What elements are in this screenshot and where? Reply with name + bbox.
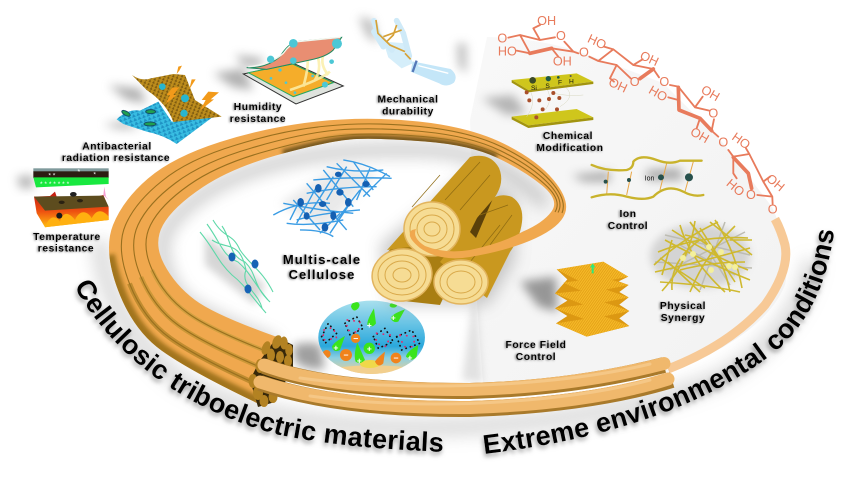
- functional groups: Si: [531, 85, 537, 92]
- palm: [383, 42, 413, 68]
- fibre shadow: [205, 235, 265, 305]
- hot layer: [34, 187, 109, 227]
- label: Humidity resistance: resistance: [230, 114, 286, 125]
- charge signs: −: [393, 353, 398, 363]
- water scene: [318, 301, 425, 374]
- functional groups: [529, 75, 574, 92]
- glucose chain molecule: [497, 14, 787, 216]
- icon: temperature resistance: [17, 167, 109, 227]
- tube ends: [248, 334, 293, 407]
- label: Multis-cale Cellulose: Cellulose: [289, 267, 355, 282]
- charge signs: +: [367, 343, 372, 353]
- icon: green nanofibres: [200, 220, 273, 313]
- dark core: [250, 337, 293, 407]
- functional groups: H: [569, 78, 574, 85]
- label: Antibacterial radiation resistance: radiation resistance: [62, 153, 170, 164]
- ring 1: OH: [553, 54, 572, 68]
- ring 3: O: [708, 107, 718, 121]
- bacteria: [121, 109, 156, 126]
- ring body: [109, 119, 566, 403]
- panel left edge shadow: [462, 303, 483, 383]
- network shadow: [650, 224, 750, 288]
- ring 2: HO: [585, 32, 609, 52]
- link O: O: [718, 136, 728, 150]
- label: Physical Synergy: Synergy: [661, 313, 705, 324]
- cream fibre: upper: [264, 364, 664, 391]
- label: Temperature resistance: resistance: [38, 244, 94, 254]
- curved title: Cellulosic triboelectric materials: Cellulosic triboelectric materials: [74, 280, 444, 458]
- ring 3: [646, 83, 722, 146]
- network shadow: [280, 167, 377, 230]
- forearm: [411, 61, 456, 86]
- icon shadow: [482, 95, 527, 115]
- icon: force field layered stack: [520, 262, 629, 337]
- icon: molecular scene ellipse: [293, 301, 425, 377]
- particles: [228, 252, 258, 294]
- fibres: [200, 220, 273, 313]
- link O: O: [579, 46, 589, 60]
- label: Temperature resistance: Temperature: [33, 232, 101, 243]
- ring 2: OH: [638, 48, 661, 69]
- field arrow: [590, 263, 595, 273]
- panel: extreme conditions background: [470, 37, 787, 386]
- ring 2: [585, 32, 661, 96]
- molecular dots: [322, 317, 420, 350]
- stack shadow: [520, 277, 557, 312]
- particles: [159, 83, 189, 117]
- fingers: [374, 21, 409, 56]
- tube shading lower: [130, 284, 262, 386]
- sand: [340, 366, 402, 374]
- lower depth shading: [108, 255, 257, 403]
- linkers: [527, 87, 583, 117]
- ring 1: HO: [498, 44, 517, 58]
- outer disc shadow: [100, 240, 812, 428]
- functional groups: F: [558, 80, 562, 87]
- fibres: [273, 160, 392, 237]
- curved path left: [74, 286, 470, 453]
- label: Force Field Control: Force Field: [506, 340, 566, 351]
- icon: robotic hand: [358, 17, 467, 86]
- icon shadow: [213, 55, 263, 90]
- wrist: [413, 61, 417, 72]
- ring 3: OH: [699, 83, 722, 104]
- gray fibres: [655, 222, 752, 290]
- label: Ion Control: Ion: [619, 209, 637, 220]
- cold layer: * * * * * * *: [40, 181, 70, 188]
- inner ring shadow: [162, 150, 545, 345]
- rear right log body: [440, 195, 522, 298]
- curved path right: [484, 215, 836, 454]
- ring 4: OH: [764, 171, 787, 194]
- fibre bundle cut end: [248, 334, 293, 407]
- bottom plate: [512, 109, 593, 128]
- yellow fibres: [654, 220, 752, 292]
- charge signs: +: [407, 353, 412, 363]
- ring 3: OH: [688, 125, 711, 146]
- label: Ion Control: Control: [608, 221, 648, 232]
- curved title: Extreme environmental conditions: Extreme environmental conditions: [480, 230, 836, 460]
- lower left log face: [368, 244, 436, 306]
- fibre bundle ring: [108, 119, 566, 403]
- label: Chemical Modification: Chemical: [543, 131, 593, 142]
- ring 3: HO: [646, 83, 670, 105]
- icon: ion control chains: [572, 157, 703, 199]
- icon: cellulose fibre network: [273, 160, 392, 237]
- top plate: [512, 73, 593, 92]
- icon shadow: [358, 17, 467, 73]
- chains: [592, 157, 703, 199]
- icon shadows: [103, 85, 147, 128]
- base plate: [243, 63, 343, 104]
- grain lines: [412, 162, 512, 262]
- tendons: [376, 20, 411, 59]
- ring 1: [497, 14, 578, 68]
- charge signs: −: [353, 333, 358, 343]
- stack zigzag wall: [555, 269, 629, 337]
- nodes: [680, 244, 738, 273]
- label: Force Field Control: Control: [516, 352, 556, 363]
- top flap: [247, 37, 342, 69]
- label: Chemical Modification: Modification: [536, 143, 604, 154]
- ring 4: HO: [724, 176, 747, 199]
- charge signs: +: [391, 312, 396, 322]
- blue mesh: [117, 102, 213, 144]
- label: Antibacterial radiation resistance: Antibacterial: [82, 142, 152, 152]
- lower right log face: [434, 260, 488, 304]
- icon: physical synergy network: [650, 220, 752, 292]
- label: Mechanical durability: Mechanical: [377, 94, 439, 106]
- charge signs: [334, 316, 412, 363]
- ring 2: O: [630, 75, 640, 89]
- icon: wood logs: [368, 156, 522, 306]
- cold layer: * *: [48, 173, 56, 180]
- ring 1: O: [497, 32, 507, 46]
- charge signs: +: [367, 320, 372, 330]
- icon: chemical modification plates: [482, 73, 593, 128]
- ions: [604, 173, 693, 184]
- highlight: [418, 66, 448, 73]
- charge signs: +: [357, 355, 362, 365]
- ring 4: [724, 130, 787, 216]
- icon shadow: [572, 168, 683, 182]
- droplets: [267, 39, 342, 94]
- ring 1: O: [556, 29, 566, 43]
- label: Mechanical durability: durability: [382, 106, 434, 118]
- lightning bolts: [166, 66, 219, 111]
- charge signs: +: [333, 343, 338, 353]
- positive drops: [332, 302, 418, 363]
- top inner shading: [283, 139, 496, 158]
- lower left log body: [385, 212, 470, 305]
- ions: [525, 90, 561, 119]
- cold layer: *: [93, 172, 96, 179]
- gold mesh: [132, 74, 222, 122]
- ellipse shadow: [293, 343, 325, 369]
- log gap: [470, 196, 494, 238]
- fibres: [290, 50, 330, 90]
- logs shadow: [380, 172, 515, 305]
- top log face: [404, 202, 460, 256]
- icon shadow: [17, 175, 33, 188]
- nanoparticles: [297, 172, 370, 232]
- cold layer: [33, 167, 109, 188]
- charge signs: −: [343, 350, 348, 360]
- layers: [555, 262, 629, 337]
- thin cream fibre: [668, 219, 786, 369]
- ring 4: O: [746, 188, 756, 202]
- ring 4: O: [768, 202, 778, 216]
- ring 1: OH: [537, 14, 556, 28]
- negative balls: [323, 334, 401, 365]
- orange layer: [248, 64, 333, 97]
- label: Multis-cale Cellulose: Multis-cale: [283, 252, 361, 267]
- functional groups: S: [545, 83, 550, 90]
- label: Humidity resistance: Humidity: [234, 102, 282, 113]
- connectors: [607, 162, 693, 195]
- cream fibre: lower: [260, 379, 672, 409]
- ring 2: OH: [606, 75, 629, 96]
- icon: antibacterial radiation: [103, 66, 222, 144]
- label: Physical Synergy: Physical: [660, 301, 706, 312]
- tube divisions: [121, 124, 563, 387]
- ion label: Ion: [645, 176, 654, 183]
- cold layer: *: [77, 167, 80, 176]
- top log body: [387, 156, 501, 250]
- link O: O: [659, 75, 669, 89]
- ring 4: HO: [729, 130, 753, 152]
- icon: humidity device: [213, 37, 343, 104]
